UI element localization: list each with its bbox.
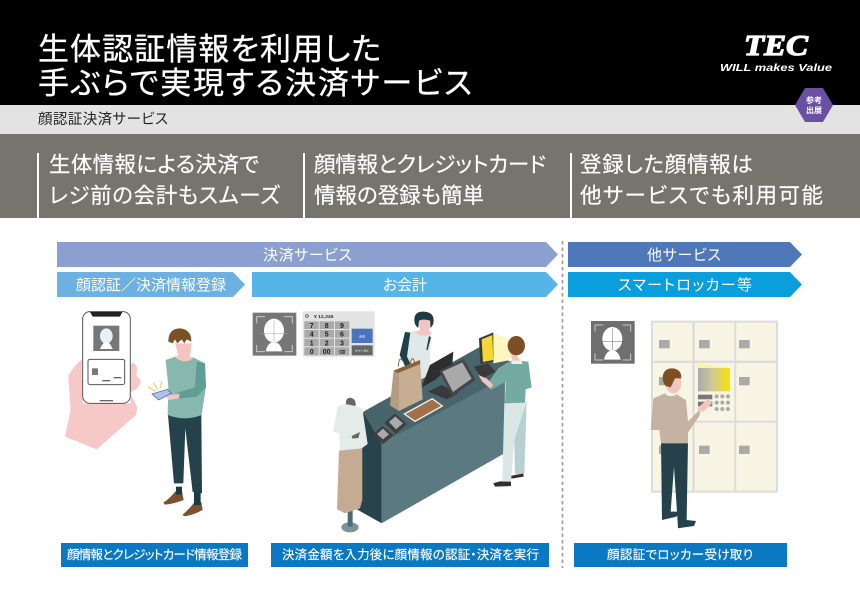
- arrow: スマートロッカー等: [568, 272, 802, 297]
- icon: face scan panel: [591, 321, 635, 364]
- title: [38, 32, 472, 101]
- arrow: 顔認証／決済情報登録: [57, 272, 245, 297]
- title: 手ぶらで実現する決済サービス: [38, 66, 472, 101]
- subtitle strip: 顔認証決済サービス: [38, 111, 168, 128]
- feature 2 text: [314, 153, 546, 208]
- feature 2 text: 顔情報とクレジットカード: [314, 153, 546, 177]
- logo: TEC: [720, 30, 833, 74]
- header band: [0, 0, 860, 105]
- icon: payment keypad: 3: [340, 340, 344, 347]
- badge: 参考出展: 出展: [806, 105, 822, 115]
- arrow: お会計: [252, 272, 558, 297]
- arrow: 顔認証／決済情報登録: 顔認証／決済情報登録: [76, 277, 226, 294]
- feature 3 text: 他サービスでも利用可能: [580, 184, 823, 208]
- icon: face scan panel: [253, 313, 296, 356]
- illustration: registration (hand, phone and person): [65, 312, 206, 516]
- icon: payment keypad: 8: [325, 323, 329, 330]
- icon: locker control panel: [695, 363, 730, 411]
- title: 生体認証情報を利用した: [38, 32, 381, 67]
- arrow: 他サービス: [568, 242, 802, 267]
- caption: checkout: [271, 543, 549, 567]
- icon: shopping bag: [390, 359, 423, 411]
- icon: payment keypad: ¥ 12,345: [314, 314, 334, 320]
- caption: locker: 顔認証でロッカー受け取り: [607, 548, 753, 562]
- icon: payment keypad: キャンセル: [355, 348, 369, 353]
- feature 3 text: 登録した顔情報は: [580, 153, 753, 177]
- icon: smartphone: [83, 312, 130, 403]
- icon: payment keypad: 7: [310, 323, 314, 330]
- logo: TEC: TEC: [744, 30, 809, 62]
- arrow: お会計: お会計: [383, 277, 427, 294]
- icon: POS terminal: [422, 352, 476, 399]
- feature 3 text: [580, 153, 823, 208]
- badge: 参考出展: 参考: [806, 95, 822, 105]
- subtitle strip: [0, 105, 860, 134]
- arrow: スマートロッカー等: スマートロッカー等: [618, 276, 752, 294]
- icon: payment keypad: 2: [325, 340, 329, 347]
- feature band: [0, 134, 860, 218]
- icon: payment keypad: 決済: [359, 333, 365, 338]
- icon: cash tray: [404, 399, 442, 421]
- icon: hand: [65, 359, 141, 449]
- caption: locker: [574, 543, 787, 567]
- badge: 参考出展: [795, 88, 833, 122]
- icon: person at locker: [651, 368, 712, 528]
- illustration: smart locker: [591, 321, 778, 528]
- caption: registration: [61, 543, 248, 567]
- icon: face recognition terminal: [474, 332, 512, 379]
- caption: registration: 顔情報とクレジットカード情報登録: [67, 547, 242, 562]
- icon: locker: [651, 321, 778, 493]
- icon: customer: [478, 336, 532, 487]
- feature 1 text: [49, 153, 280, 208]
- arrow: 決済サービス: [57, 242, 558, 267]
- icon: payment keypad: 0: [310, 349, 314, 356]
- counter: [357, 345, 510, 523]
- icon: payment keypad: 00: [323, 349, 331, 356]
- icon: mannequin: [333, 398, 368, 532]
- icon: standing person with phone: [148, 328, 206, 516]
- icon: payment keypad: ⌫: [338, 350, 346, 355]
- feature 2 text: 情報の登録も簡単: [314, 184, 484, 208]
- icon: clerk: [400, 312, 434, 383]
- logo: TEC: WILL makes Value: [720, 63, 833, 74]
- icon: payment keypad: [303, 311, 375, 357]
- caption: checkout: 決済金額を入力後に顔情報の認証・決済を実行: [282, 547, 539, 562]
- arrow: 他サービス: 他サービス: [647, 247, 721, 264]
- illustration: checkout counter: [253, 311, 532, 532]
- icon: payment keypad: 5: [325, 332, 329, 339]
- icon: payment keypad: 6: [340, 332, 344, 339]
- icon: payment keypad: 4: [310, 332, 314, 339]
- icon: card readers: [372, 413, 407, 444]
- arrow: 決済サービス: 決済サービス: [263, 247, 352, 264]
- feature 1 text: 生体情報による決済で: [49, 153, 259, 177]
- icon: payment keypad: 9: [340, 323, 344, 330]
- feature 1 text: レジ前の会計もスムーズ: [49, 184, 280, 208]
- icon: payment keypad: 1: [310, 340, 314, 347]
